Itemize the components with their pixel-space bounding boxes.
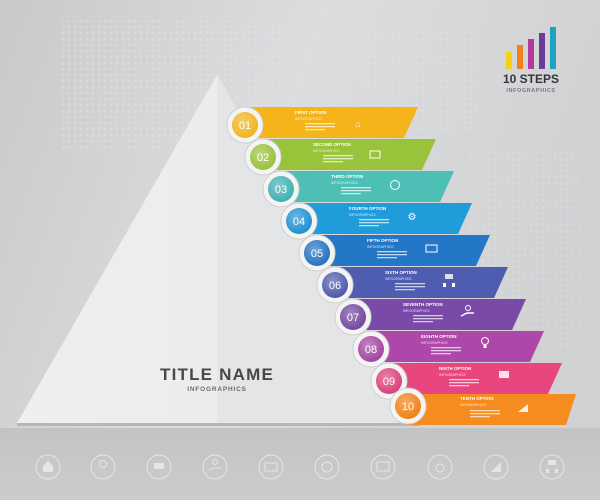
title — [160, 365, 274, 393]
pyramid — [17, 75, 420, 426]
title: TITLE NAME — [160, 365, 274, 384]
step 9: NINTH OPTION — [439, 366, 471, 371]
step 2: 02 — [257, 152, 269, 164]
step 8: EIGHTH OPTION — [421, 334, 457, 339]
step 9 — [371, 363, 562, 399]
step 6 — [317, 267, 508, 303]
step 10: 10 — [402, 401, 414, 413]
bottom icon row — [36, 455, 564, 479]
step 7: SEVENTH OPTION — [403, 302, 443, 307]
step 3: THIRD OPTION — [331, 174, 363, 179]
step 2 — [245, 139, 436, 175]
step 10: INFOGRAPHICS — [460, 403, 487, 407]
step 3 — [263, 171, 454, 207]
step 5: INFOGRAPHICS — [367, 245, 394, 249]
step 8: INFOGRAPHICS — [421, 341, 448, 345]
step 7 — [335, 299, 526, 335]
step 9: 09 — [383, 376, 395, 388]
logo: 10 steps: INFOGRAPHICS — [506, 88, 556, 94]
step 10 — [390, 388, 576, 425]
title: INFOGRAPHICS — [187, 386, 247, 393]
step 7: 07 — [347, 312, 359, 324]
step 5: 05 — [311, 248, 323, 260]
logo: 10 steps — [503, 27, 559, 94]
step 1: INFOGRAPHICS — [295, 117, 322, 121]
step 3: INFOGRAPHICS — [331, 181, 358, 185]
step 3: 03 — [275, 184, 287, 196]
step 5: FIFTH OPTION — [367, 238, 398, 243]
step 1: FIRST OPTION — [295, 110, 326, 115]
step 4: 04 — [293, 216, 305, 228]
step 5 — [299, 235, 490, 271]
step 2: INFOGRAPHICS — [313, 149, 340, 153]
step 9: INFOGRAPHICS — [439, 373, 466, 377]
step 2: SECOND OPTION — [313, 142, 351, 147]
step 4: FOURTH OPTION — [349, 206, 386, 211]
step 1: 01 — [239, 120, 251, 132]
logo: 10 steps: 10 STEPS — [503, 72, 559, 86]
step 6: INFOGRAPHICS — [385, 277, 412, 281]
step 6: SIXTH OPTION — [385, 270, 417, 275]
step 8 — [353, 331, 544, 367]
step 1 — [227, 107, 418, 143]
step 8: 08 — [365, 344, 377, 356]
step 7: INFOGRAPHICS — [403, 309, 430, 313]
step 1: ⌂ — [355, 119, 361, 129]
step 6: 06 — [329, 280, 341, 292]
step 4: INFOGRAPHICS — [349, 213, 376, 217]
step 10: TENTH OPTION — [460, 396, 494, 401]
step 4: ⚙ — [408, 212, 417, 223]
step 4 — [281, 203, 472, 239]
